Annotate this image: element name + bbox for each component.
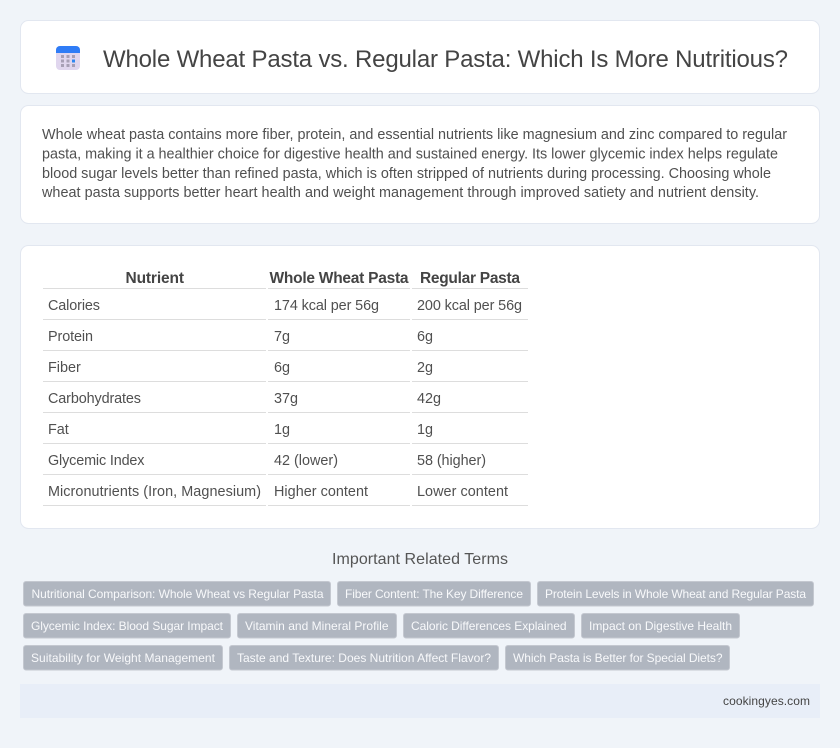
row: micronutrients: Lower content xyxy=(417,484,508,500)
row: fiber: 6g xyxy=(274,360,290,376)
row: glycemic index: Glycemic Index xyxy=(48,453,145,469)
tag: Vitamin and Mineral Profile xyxy=(245,619,389,633)
row: protein: 7g xyxy=(274,329,290,345)
row: protein xyxy=(48,329,433,345)
row: carbohydrates xyxy=(48,391,441,407)
panel: summary xyxy=(20,106,820,224)
tag group: related terms xyxy=(24,582,814,670)
row: fat: 1g xyxy=(417,422,433,438)
table header row xyxy=(126,270,520,287)
heading: related terms: Important Related Terms xyxy=(332,551,508,568)
title: Whole Wheat Pasta vs. Regular Pasta: Which Is More Nutritious? xyxy=(103,46,788,73)
tag xyxy=(24,646,222,670)
tag: Protein Levels in Whole Wheat and Regular Pasta xyxy=(545,587,806,601)
table rules xyxy=(43,288,528,506)
tag: Nutritional Comparison: Whole Wheat vs Regular Pasta xyxy=(32,587,324,601)
text block: summary paragraph: wheat pasta supports better heart health and weight management through improved satiety and nutrient density. xyxy=(41,185,759,201)
row: calories: 174 kcal per 56g xyxy=(274,298,379,314)
row: glycemic index: 58 (higher) xyxy=(417,453,486,469)
tag: Suitability for Weight Management xyxy=(31,651,216,665)
row: carbohydrates: 42g xyxy=(417,391,441,407)
row: calories: Calories xyxy=(48,298,100,314)
row: micronutrients xyxy=(48,484,508,500)
row: fat: 1g xyxy=(274,422,290,438)
icon: calendar xyxy=(56,46,80,70)
tag xyxy=(338,582,530,606)
footer xyxy=(20,684,820,718)
tag xyxy=(238,614,396,638)
row: carbohydrates: Carbohydrates xyxy=(48,391,141,407)
row: glycemic index xyxy=(48,453,486,469)
row: calories xyxy=(48,298,522,314)
row: fat: Fat xyxy=(48,422,69,438)
tag xyxy=(506,646,730,670)
row: fiber xyxy=(48,360,433,376)
tag xyxy=(582,614,740,638)
footer source text: cookingyes.com xyxy=(723,694,810,708)
row: micronutrients: Micronutrients (Iron, Magnesium) xyxy=(48,484,261,500)
text block: summary paragraph: pasta, making it a healthier choice for digestive health and sustained energy. Its lower glycemic index helps regulate xyxy=(42,146,778,162)
tag: Fiber Content: The Key Difference xyxy=(345,587,523,601)
tag: Glycemic Index: Blood Sugar Impact xyxy=(31,619,224,633)
row: micronutrients: Higher content xyxy=(274,484,368,500)
row: fat xyxy=(48,422,433,438)
row: carbohydrates: 37g xyxy=(274,391,298,407)
table header row: Regular Pasta xyxy=(420,270,520,287)
tag xyxy=(24,614,230,638)
tag: Which Pasta is Better for Special Diets? xyxy=(513,651,723,665)
text block: summary paragraph: Whole wheat pasta contains more fiber, protein, and essential nutrients like magnesium and zinc compared to regular xyxy=(42,127,787,143)
tag xyxy=(404,614,574,638)
row: calories: 200 kcal per 56g xyxy=(417,298,522,314)
tag: Taste and Texture: Does Nutrition Affect Flavor? xyxy=(237,651,491,665)
row: protein: Protein xyxy=(48,329,93,345)
tag: Caloric Differences Explained xyxy=(411,619,566,633)
table header row: Whole Wheat Pasta xyxy=(270,270,409,287)
panel: nutrition table xyxy=(20,246,820,528)
tag xyxy=(24,582,330,606)
tag: Impact on Digestive Health xyxy=(589,619,732,633)
row: protein: 6g xyxy=(417,329,433,345)
tag xyxy=(538,582,814,606)
tag xyxy=(230,646,498,670)
text block: summary paragraph: blood sugar levels better than refined pasta, which is often stripped of nutrients during processing. Choosing whole xyxy=(42,166,771,182)
row: fiber: Fiber xyxy=(48,360,81,376)
row: glycemic index: 42 (lower) xyxy=(274,453,338,469)
panel: header xyxy=(20,20,820,94)
text block: summary paragraph xyxy=(41,127,787,201)
table header row: Nutrient xyxy=(126,270,184,287)
row: fiber: 2g xyxy=(417,360,433,376)
